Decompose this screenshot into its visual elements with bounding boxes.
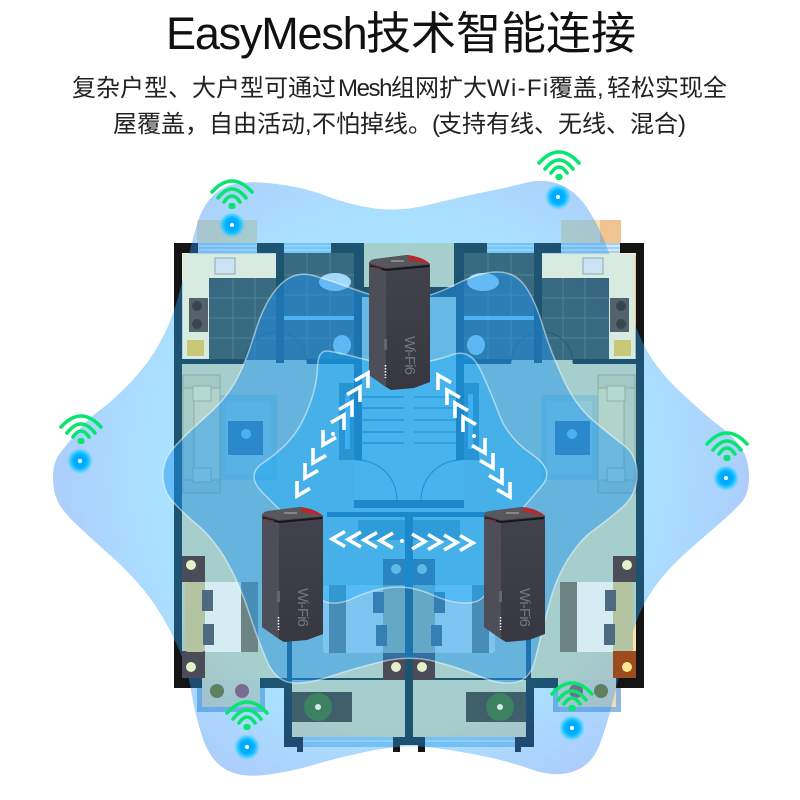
subtitle text: 不怕掉线。 [312, 111, 432, 138]
right furniture [413, 254, 636, 722]
signal icon: left [61, 416, 101, 474]
subtitle text: , [305, 111, 312, 138]
coverage blob: middle [163, 272, 637, 683]
subtitle text: Mesh [338, 75, 391, 102]
signal icon: top right [539, 152, 579, 210]
coverage blob: outer [53, 181, 749, 776]
title: 技术智能连接 [366, 8, 636, 59]
subtitle text: Wi-Fi [487, 75, 549, 102]
router: top [369, 255, 430, 390]
subtitle text: ) [678, 111, 686, 138]
router: left: Wi-Fi6 [294, 588, 311, 627]
subtitle text: ( [432, 111, 440, 138]
signal icon: bottom left [227, 702, 267, 760]
floor plan [174, 220, 644, 752]
subtitle text: , [597, 75, 604, 102]
centre wall [405, 517, 413, 737]
subtitle text: 轻松实现全 [607, 75, 727, 102]
top right balcony warm corner [600, 220, 621, 243]
arrows: left router to right router [332, 532, 473, 550]
router: right [484, 507, 545, 642]
top right kitchen wood strip [622, 255, 636, 359]
subtitle text: 屋覆盖，自由活动 [113, 111, 305, 138]
coverage blob: inner [254, 351, 547, 603]
left half of floor plan [174, 220, 457, 752]
subtitle text: 覆盖 [549, 75, 597, 102]
warm lamp [613, 651, 636, 678]
furniture and light surfaces above the outer tint [182, 254, 636, 722]
router: left [262, 507, 323, 642]
router: right: Wi-Fi6 [516, 588, 533, 627]
right half of floor plan [361, 220, 644, 752]
signal icon: top left [212, 181, 252, 238]
subtitle text: 复杂户型、大户型可通过 [72, 75, 336, 102]
signal icon: bottom right [552, 683, 592, 741]
title: EasyMesh [166, 8, 366, 59]
left furniture [182, 254, 405, 722]
subtitle text: 组网扩大 [391, 75, 487, 102]
subtitle text [72, 75, 727, 138]
signal icon: right [707, 433, 747, 491]
arrows: right router to top router [432, 371, 516, 501]
router: top: Wi-Fi6 [401, 336, 418, 375]
subtitle text: 支持有线、无线、混合 [438, 111, 678, 138]
arrows: left router to top router [291, 369, 374, 500]
